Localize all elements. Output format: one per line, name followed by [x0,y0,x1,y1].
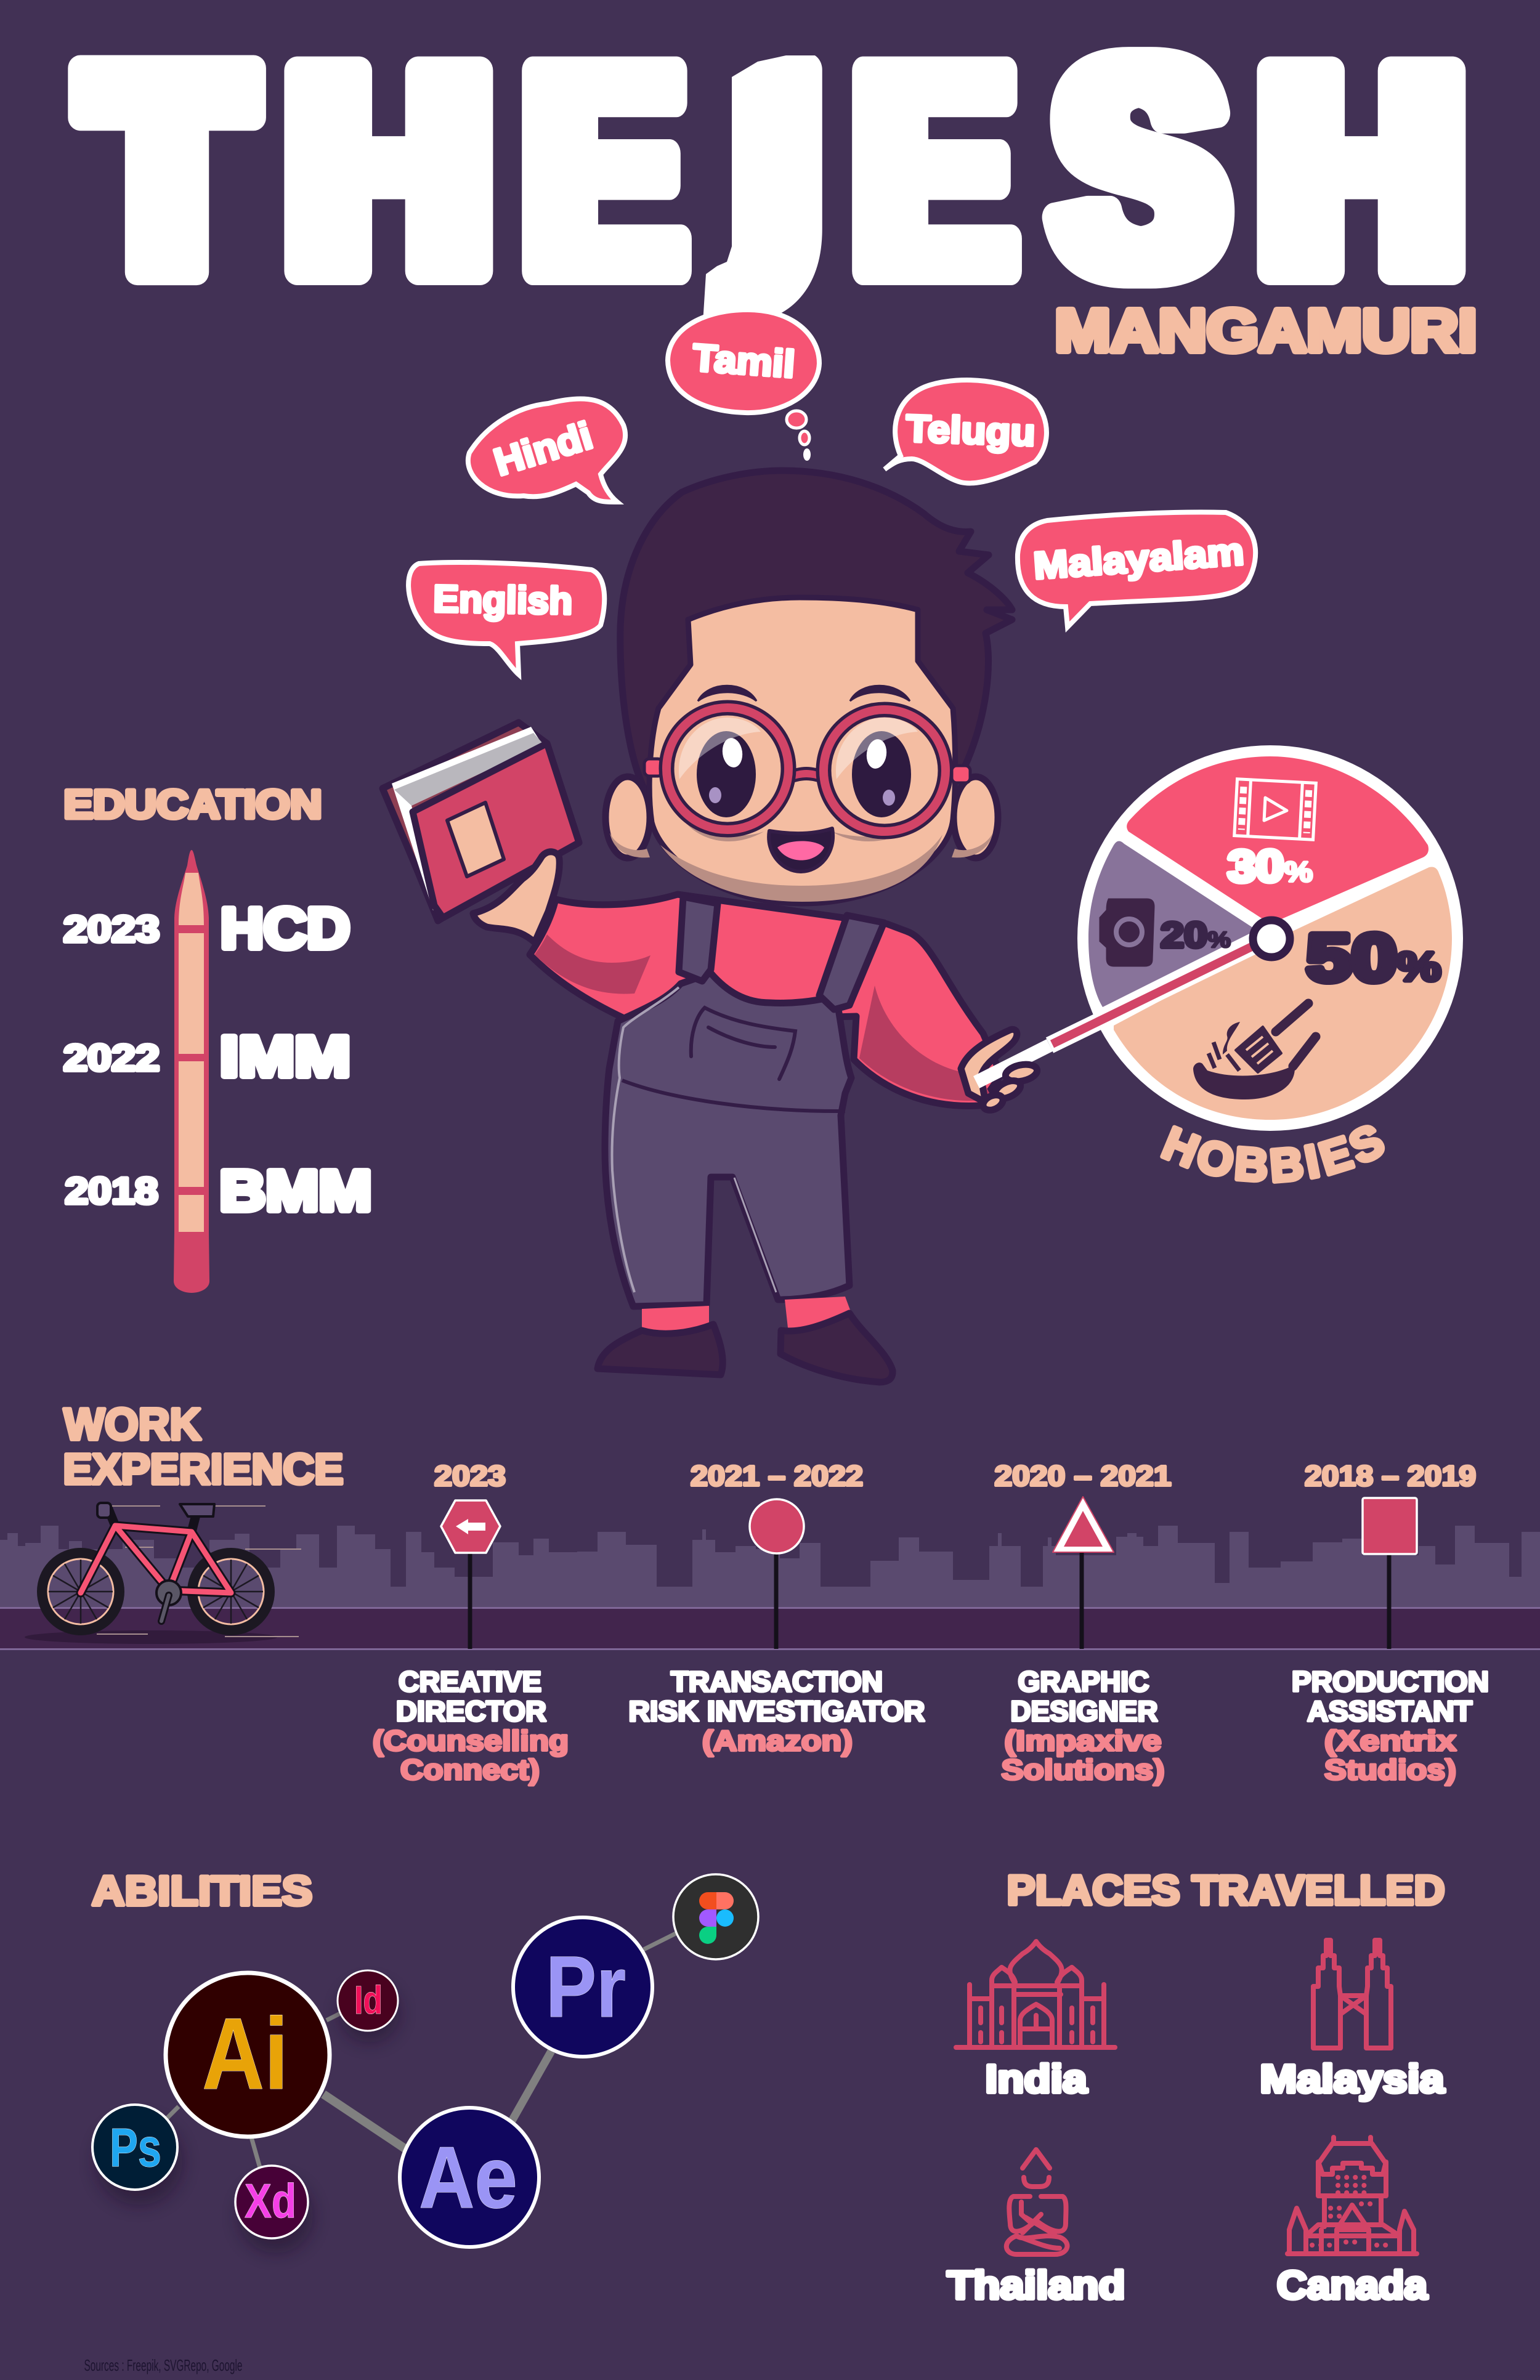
icon: Chateau [1287,2137,1417,2254]
bubble: Tamil: Tamil [691,336,796,386]
section: education [63,782,372,1293]
title: THEJESH: S [1058,1,1222,335]
label: Canada: Canada [1277,2263,1427,2307]
node: InDesign: Id [354,1978,383,2022]
character right palm [961,1029,1017,1103]
label: Thailand: Thailand [947,2263,1125,2307]
label: 30%: 30% [1228,842,1313,891]
degree HCD: HCD [221,896,350,960]
year labels: 2020 – 2021 [994,1460,1172,1492]
character right fingers [981,1062,1039,1113]
label: Malaysia: Malaysia [1260,2057,1445,2101]
title: THEJESH: T [89,21,245,320]
job: graphic designer: Solutions) [1002,1754,1164,1786]
title: THEJESH [68,47,1466,315]
heading: abilities: ABILITIES [92,1868,312,1914]
node: Illustrator [166,1973,330,2137]
job: graphic designer: DESIGNER [1010,1695,1158,1727]
node: Premiere Pro: Pr [546,1938,626,2035]
title: THEJESH: J [658,0,817,374]
language bubbles [408,310,1255,674]
slice: cooking 50% [1114,867,1452,1120]
bubble: Tamil [668,310,819,461]
character face [649,597,955,904]
character mouth [769,828,833,872]
pointer stick [976,944,1257,1082]
character: boy with glasses [383,471,1290,1382]
label: 50%: 50 % [1307,920,1441,995]
bubble: Hindi [468,399,625,502]
icon: Taj Mahal [956,1941,1115,2047]
job: transaction risk investigator: (Amazon) [702,1725,853,1757]
title: THEJESH: E [529,8,678,333]
heading: work experience [63,1400,344,1493]
node: XD [235,2166,313,2253]
bubble: Telugu: Telugu [906,407,1036,455]
sources note: Sources : Freepik, SVGRepo, Google [84,2356,243,2374]
node: Photoshop [92,2105,182,2205]
bubble: English [408,562,604,674]
character left hand [473,852,559,942]
icon: Petronas towers [1313,1940,1391,2048]
sign 2023 [441,1500,500,1649]
character ears [606,777,998,858]
sign 2020-2021 [1053,1497,1114,1649]
node: Illustrator: Ai [202,1997,288,2110]
icon: camera [1100,899,1154,966]
job: creative director: Connect) [400,1754,540,1786]
character eyes and glasses [644,708,970,841]
bubble: English: English [433,578,573,623]
node: Premiere Pro [513,1917,652,2057]
sign 2018-2019 [1363,1498,1417,1649]
degree IMM: IMM [220,1024,351,1088]
title: THEJESH: H [290,7,487,333]
job: creative director: (Counselling [373,1725,569,1757]
year 2018: 2018 [65,1170,158,1212]
pie disc [1077,745,1463,1131]
road [0,1607,1540,1650]
year labels: 2018 – 2019 [1305,1460,1476,1492]
book [383,722,579,921]
heading: education: EDUCATION [64,782,322,827]
degree BMM: BMM [219,1159,372,1223]
title: THEJESH: E [859,8,1008,333]
heading: places travelled: PLACES TRAVELLED [1007,1867,1445,1914]
job: production assistant: (Xentrix [1324,1725,1457,1757]
subtitle: MANGAMURI: MANGAMURI [1055,297,1477,364]
node: XD: Xd [245,2174,296,2228]
character eyebrows [698,686,910,701]
character chin shadow [660,835,942,902]
icon: Buddha [1007,2150,1067,2254]
job: production assistant: PRODUCTION [1292,1666,1489,1698]
job: graphic designer: GRAPHIC [1018,1666,1149,1698]
job: creative director [373,1666,569,1786]
label: India: India [986,2057,1087,2101]
bubble: Malayalam [1018,512,1255,627]
job: production assistant [1292,1666,1489,1786]
icon: film [1234,779,1316,840]
character shirt [530,894,1001,1106]
character socks and shoes [598,1297,893,1382]
bubble: Hindi: Hindi [489,415,598,484]
node: Photoshop: Ps [110,2117,161,2178]
hub of pointer [1253,920,1290,957]
job: graphic designer [1002,1666,1164,1786]
heading: work experience: WORK [64,1400,201,1449]
slice: movies 30% [1127,756,1429,924]
year 2023: 2023 [63,909,160,950]
job: creative director: CREATIVE [399,1666,541,1698]
icon: bicycle [25,1503,301,1644]
sign 2021-2022 [750,1499,804,1649]
character hair [620,471,1012,807]
job: production assistant: Studios) [1324,1754,1456,1786]
icon: frying pan [1193,1003,1316,1099]
label: HOBBIES: HOBBIES [1160,1125,1385,1184]
pencil timeline [174,850,209,1293]
job: transaction risk investigator [628,1666,925,1757]
heading: work experience: EXPERIENCE [63,1445,344,1493]
bubble: Malayalam: Malayalam [1032,530,1246,588]
node: InDesign [338,1970,399,2042]
title: THEJESH: H [1263,7,1460,333]
section: places travelled [947,1867,1445,2307]
slice: photography 20% [1088,841,1257,1007]
node: Figma [673,1874,758,1959]
section: abilities [92,1868,758,2253]
label: 20%: 20 % [1161,915,1231,955]
connectors [160,1931,681,2174]
job: production assistant: ASSISTANT [1307,1695,1472,1727]
year 2022: 2022 [63,1037,160,1079]
section: work experience [0,1400,1540,1786]
job: creative director: DIRECTOR [396,1695,546,1727]
pie chart: hobbies [1077,745,1463,1131]
bubble: Telugu [885,380,1047,483]
node: After Effects: Ae [419,2129,517,2227]
job: transaction risk investigator: RISK INVESTIGATOR [628,1695,925,1727]
city skyline [0,1526,1540,1609]
year labels: 2021 – 2022 [691,1460,863,1492]
year labels [434,1460,1476,1492]
job: graphic designer: (Impaxive [1004,1725,1162,1757]
year labels: 2023 [434,1460,506,1492]
node: After Effects [400,2108,539,2247]
character overalls [605,897,884,1306]
job: transaction risk investigator: TRANSACTION [671,1666,883,1698]
